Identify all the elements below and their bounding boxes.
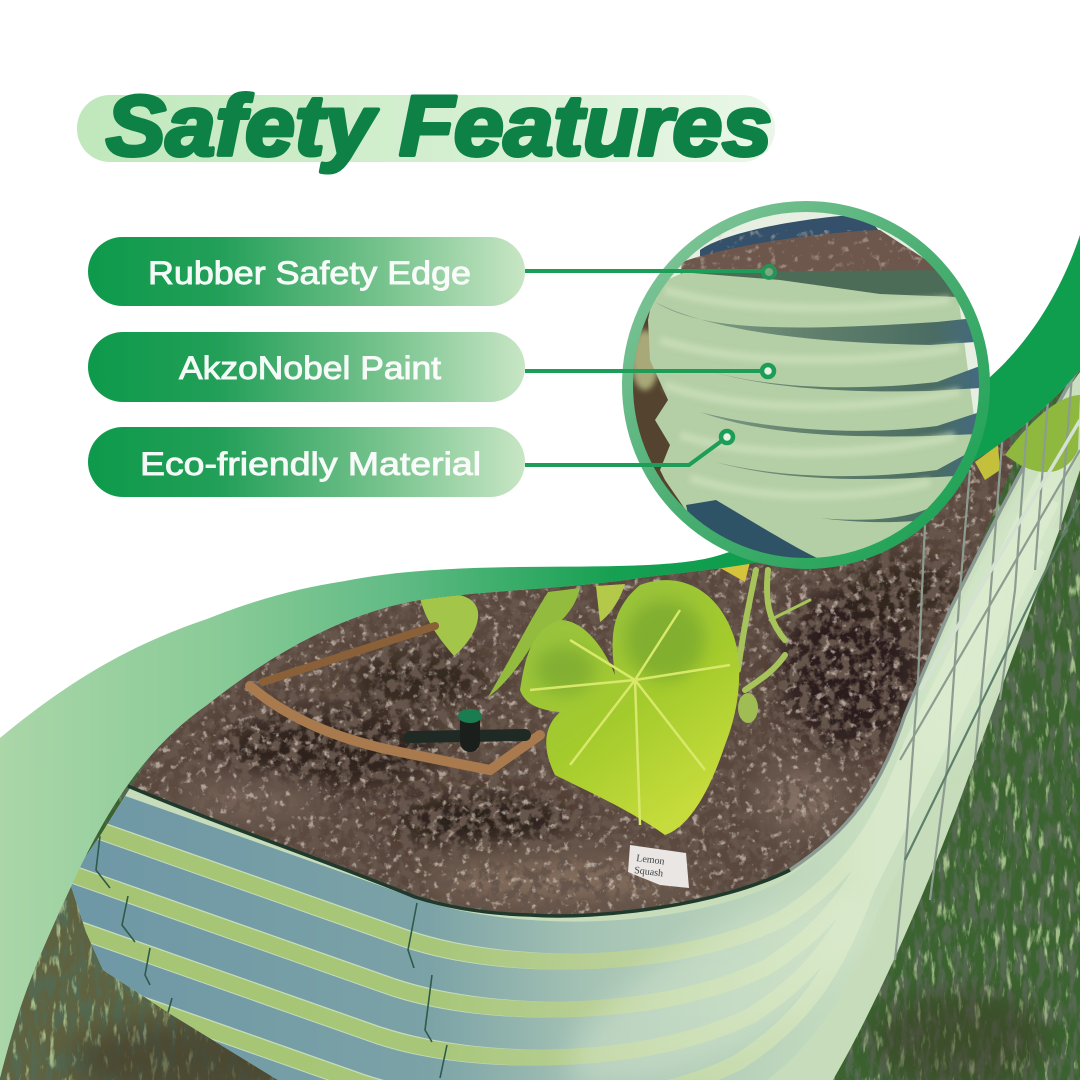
pill: Rubber Safety Edge: Rubber Safety Edge bbox=[148, 255, 471, 291]
green corrugated bands bbox=[648, 272, 985, 560]
title: Safety Features bbox=[106, 79, 772, 174]
large squash leaf bbox=[520, 580, 739, 835]
pill: Rubber Safety Edge bbox=[88, 237, 525, 306]
dark lower shadow bbox=[686, 500, 817, 558]
title highlight bar bbox=[77, 95, 775, 162]
corrugation shadows bbox=[655, 302, 975, 345]
grass ground bbox=[0, 340, 1080, 1080]
planter wall with corrugated stripes bbox=[0, 360, 1080, 1080]
photo: raised garden bed bbox=[0, 340, 1080, 1080]
pill: AkzoNobel Paint bbox=[88, 332, 525, 402]
blue back wall bbox=[700, 216, 878, 256]
small leaves bbox=[420, 395, 1080, 697]
close-up photo bbox=[633, 212, 979, 558]
marker: paint bbox=[762, 365, 774, 377]
circle ring bbox=[628, 206, 984, 564]
metal right rim bbox=[790, 372, 1076, 870]
plant label: Lemon Squash bbox=[628, 845, 689, 888]
panel seams bbox=[96, 836, 447, 1078]
plant label: Lemon Squash: Squash bbox=[634, 865, 664, 880]
marker: rubber safety edge bbox=[763, 266, 775, 278]
plant label: Lemon Squash: Lemon bbox=[636, 853, 665, 867]
pill: Eco-friendly Material: Eco-friendly Material bbox=[140, 446, 481, 482]
wire trellis bbox=[895, 375, 1080, 960]
planter rim bbox=[128, 786, 790, 916]
vine stems bbox=[738, 570, 810, 723]
green wave band bbox=[0, 235, 1080, 1078]
connector lines bbox=[525, 271, 769, 465]
marker: material bbox=[721, 431, 733, 443]
drip irrigation pipe bbox=[250, 626, 540, 770]
soil strip bbox=[680, 230, 936, 274]
crest highlights bbox=[660, 290, 960, 496]
soil bed bbox=[132, 437, 1014, 914]
detail circle: close-up of bed wall bbox=[620, 200, 1000, 570]
pill: Eco-friendly Material bbox=[88, 427, 525, 497]
pill: AkzoNobel Paint: AkzoNobel Paint bbox=[179, 350, 441, 386]
